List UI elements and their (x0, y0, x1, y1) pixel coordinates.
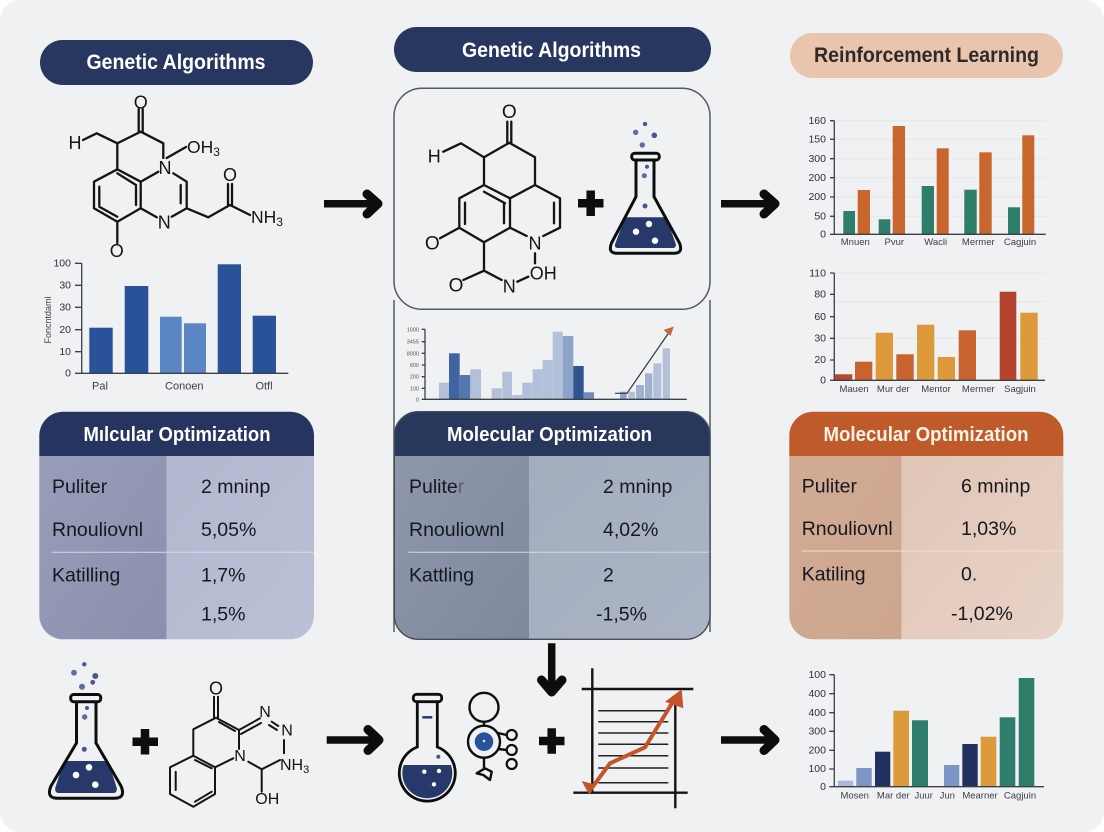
bar chart: right middle: 80 (814, 288, 826, 300)
molecule: center structure: H (428, 147, 441, 167)
icon: plus bottom center (539, 728, 564, 754)
heading: left column Genetic Algorithms: Genetic Algorithms (86, 51, 266, 74)
molecule: left top structure: H (68, 133, 82, 153)
bar chart: right middle: Mermer (962, 384, 995, 395)
molecule: left top structure: 3 (276, 215, 283, 229)
molecule: center structure: N (528, 234, 542, 254)
bar chart: bottom right: 100 (808, 763, 826, 775)
molecule: center structure: N (503, 277, 516, 297)
molecule: bottom left structure: 3 (303, 764, 309, 776)
bar chart: left concentration: Foncntdaml (43, 296, 53, 344)
molecule: bottom left structure: O (209, 678, 223, 698)
bar chart: right middle: Mauen (839, 384, 869, 395)
bar chart: left concentration: 10 (59, 346, 71, 358)
arrow: bottom center to right (721, 730, 775, 750)
molecule: bottom left structure: N (259, 704, 271, 721)
heading: left column Genetic Algorithms (40, 40, 313, 85)
bar chart: center histogram with trend arrow: 1000 (407, 327, 419, 333)
table rows: 0. (961, 564, 977, 586)
molecule: bottom left structure: OH (255, 791, 279, 808)
molecule: left top structure: O (223, 165, 237, 185)
heading: right column Reinforcement Learning (790, 33, 1063, 78)
table rows: Kattling (409, 564, 474, 586)
molecule: left top structure: N (158, 212, 171, 232)
heading: center column Genetic Algorithms: Genetic Algorithms (462, 39, 641, 62)
bar chart: bottom right: 100 (808, 669, 826, 681)
icon: line chart with rising arrow (573, 668, 693, 808)
molecule: bottom left structure: N (281, 722, 293, 740)
bar chart: right top: Mnuen (841, 237, 870, 248)
table title: Mılcular Optimization (84, 424, 270, 446)
bar chart: right top: 160 (808, 115, 826, 127)
bar chart: right middle: Sagjuin (1004, 384, 1036, 395)
bar chart: center histogram with trend arrow: 0 (416, 398, 419, 404)
icon: plus center (578, 190, 604, 216)
icon: network node diagram (468, 693, 517, 780)
table rows: Rnouliovnl (52, 519, 143, 541)
bar chart: right middle: Mentor (921, 384, 951, 395)
table rows: 4,02% (603, 519, 658, 541)
table title: Molecular Optimization (447, 424, 652, 446)
table rows: Puliter (52, 476, 108, 498)
panel: right results table (789, 412, 1063, 639)
bar chart: bottom right: 300 (808, 726, 826, 738)
molecule: left top structure (68, 92, 283, 261)
table rows: Rnouliovnl (802, 518, 893, 540)
bar chart: bottom right: 400 (808, 688, 826, 700)
table rows: 6 mninp (961, 476, 1031, 498)
bar chart: right middle: 110 (809, 268, 826, 280)
bar chart: center histogram with trend arrow: 600 (410, 363, 419, 369)
bar chart: right top: 200 (808, 191, 826, 203)
molecule: center structure: OH (530, 263, 557, 283)
bar chart: right middle: 60 (814, 311, 826, 323)
bar chart: right top: 150 (808, 134, 826, 146)
bar chart: right top: Mermer (962, 237, 995, 248)
table rows (409, 476, 673, 626)
bar chart: bottom right: Jun (940, 790, 955, 802)
table rows: -1,02% (951, 603, 1013, 625)
table rows: Katiling (802, 564, 866, 586)
table rows: 1,7% (201, 564, 245, 586)
bar chart: bottom right: Mar der (877, 790, 910, 802)
bar chart: right middle: 0 (820, 374, 826, 386)
table title: Molecular Optimization (824, 424, 1028, 446)
bar chart: right middle (809, 268, 1045, 395)
bar chart: left concentration: 30 (59, 280, 71, 292)
bar chart: right top (808, 115, 1046, 248)
bar chart: center histogram with trend arrow (407, 326, 687, 404)
arrow: bottom left to center (327, 730, 379, 750)
bar chart: bottom right (808, 669, 1044, 802)
panel: center results table (394, 412, 710, 639)
bar chart: right top: Pvur (885, 237, 904, 248)
bar chart: left concentration: Pal (92, 381, 108, 393)
molecule: left top structure: N (158, 158, 172, 178)
bar chart: left concentration: 20 (59, 324, 71, 336)
molecule: bottom left structure (170, 678, 309, 808)
bar chart: left concentration (43, 258, 288, 393)
molecule: center structure (425, 102, 560, 297)
bar chart: left concentration: 100 (53, 258, 71, 270)
table rows: 2 (603, 564, 614, 586)
bar chart: bottom right: Mosen (840, 790, 869, 802)
bar chart: left concentration: Conoen (165, 381, 204, 393)
molecule: left top structure: O (110, 241, 124, 261)
bar chart: bottom right: 0 (820, 781, 826, 793)
arrow: left to center (324, 194, 378, 214)
table rows (802, 476, 1031, 625)
icon: round bottom flask (399, 694, 455, 801)
table rows (52, 476, 271, 626)
icon: plus bottom left (132, 729, 158, 754)
table rows: Puliter (409, 476, 465, 498)
bar chart: right top: Wacli (924, 237, 947, 248)
icon: conical flask center (610, 122, 681, 253)
icon: conical flask bottom left (49, 662, 123, 798)
arrow: center to right (721, 194, 775, 214)
bar chart: center histogram with trend arrow: 100 (410, 386, 419, 392)
molecule: left top structure: OH (187, 137, 213, 157)
arrow: center table down (542, 643, 562, 692)
bar chart: left concentration: Otfl (255, 381, 273, 393)
molecule: bottom left structure: NH (280, 757, 303, 774)
bar chart: center histogram with trend arrow: 200 (410, 375, 419, 381)
table rows: 5,05% (201, 519, 256, 541)
heading: center column Genetic Algorithms (394, 27, 711, 72)
bar chart: bottom right: Mearner (962, 790, 998, 802)
bar chart: bottom right: Cagjuin (1004, 790, 1036, 802)
table rows: 1,5% (201, 604, 245, 626)
molecule: center structure: O (449, 276, 463, 296)
table rows: Katilling (52, 564, 120, 586)
bar chart: right middle: 30 (814, 332, 826, 344)
bar chart: bottom right: Juur (914, 790, 933, 802)
bar chart: bottom right: 400 (808, 707, 826, 719)
molecule: left top structure: O (134, 92, 148, 112)
molecule: center structure: O (502, 102, 517, 123)
table rows: -1,5% (596, 604, 647, 626)
bar chart: left concentration: 0 (65, 368, 71, 380)
heading: right column Reinforcement Learning: Reinforcement Learning (814, 44, 1039, 67)
table rows: Rnouliownl (409, 519, 504, 541)
panel: center outline frame (394, 88, 710, 632)
bar chart: right top: 50 (814, 210, 826, 222)
bar chart: right top: Cagjuin (1004, 237, 1036, 248)
bar chart: right middle: Mur der (877, 384, 910, 395)
panel: left results table (39, 412, 314, 639)
molecule: left top structure: 3 (213, 145, 220, 159)
table rows: Puliter (802, 476, 857, 498)
bar chart: right top: 0 (820, 228, 826, 240)
table rows: 1,03% (961, 518, 1016, 540)
molecule: center structure: O (425, 234, 440, 254)
bar chart: center histogram with trend arrow: 3455 (407, 340, 419, 346)
table rows: 2 mninp (201, 476, 271, 498)
molecule: left top structure: NH (251, 207, 276, 227)
bar chart: right top: 200 (808, 172, 826, 184)
bar chart: bottom right: 200 (808, 744, 826, 756)
bar chart: center histogram with trend arrow: 8000 (407, 351, 419, 357)
bar chart: left concentration: 30 (59, 302, 71, 314)
bar chart: right top: 300 (808, 153, 826, 165)
bar chart: right middle: 20 (814, 354, 826, 366)
table rows: 2 mninp (603, 476, 673, 498)
molecule: bottom left structure: N (234, 748, 246, 765)
